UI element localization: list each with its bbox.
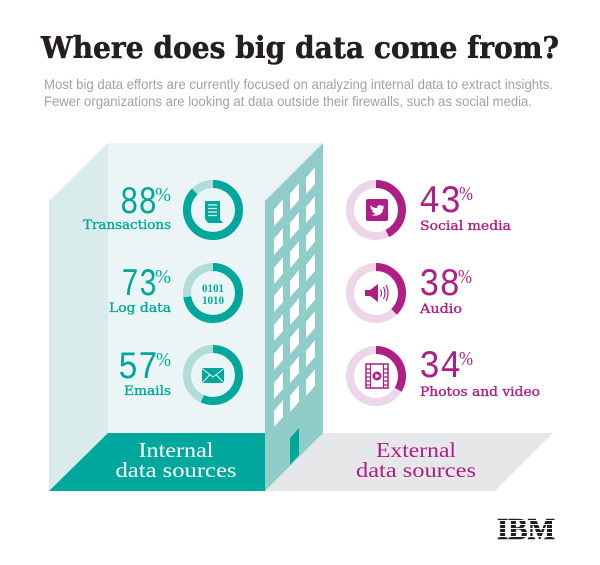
stat: log data 73%: 73 [121,263,157,307]
title: Where does big data come from? [40,31,559,66]
subtitle: Fewer organizations are looking at data outside their firewalls, such as social media. [44,93,532,109]
stat: photos and video 34%: 34 [419,345,461,389]
stat: emails 57%: % [156,349,171,371]
internal floor [49,433,265,491]
side facade [265,143,323,491]
label: external data sources [356,438,476,482]
stat: photos and video 34%: Photos and video [420,385,540,400]
door [290,428,299,465]
stat: transactions 88%: % [155,184,171,206]
stat: emails 57%: 57 [118,346,158,390]
stat: photos and video 34%: % [459,348,473,370]
stat: social media 43%: Social media [420,219,511,234]
stat: transactions 88%: 88 [120,181,157,225]
stat: audio 38%: % [458,266,472,288]
label: internal data sources [116,438,236,482]
label: internal data sources: data sources [116,458,236,482]
stat: social media 43%: % [459,183,473,205]
stat: audio 38%: 38 [419,263,460,307]
external floor [265,433,553,491]
stat: transactions 88% [83,181,239,236]
stat: audio 38%: Audio [419,302,462,317]
icon: envelope [202,368,224,383]
stat: emails 57% [118,346,239,401]
left wall [49,143,108,491]
icon: twitter bird [366,199,388,221]
icon: film strip [366,364,388,388]
subtitle [44,76,553,109]
stat: audio 38% [350,263,472,319]
icon: speaker [365,284,388,302]
stat: photos and video 34% [350,345,540,402]
label: internal data sources: Internal [138,438,214,462]
stat: log data 73%: % [155,266,171,288]
logo: IBM: IBM [497,511,555,546]
building [49,143,323,491]
label: external data sources: External [376,438,456,462]
windows [274,167,315,427]
icon: document [205,201,223,223]
subtitle: Most big data efforts are currently focused on analyzing internal data to extract insights. [44,76,553,92]
icon: binary digits: 0101 [202,284,224,295]
stat: log data 73% [109,263,239,319]
back wall [108,143,323,433]
stat: social media 43% [350,180,511,236]
label: external data sources: data sources [356,458,476,482]
stat: emails 57%: Emails [124,384,171,399]
stat: transactions 88%: Transactions [83,218,171,233]
stat: log data 73%: Log data [109,301,171,316]
icon: binary digits [202,284,224,307]
stat: social media 43%: 43 [419,180,461,224]
icon: binary digits: 1010 [202,296,224,307]
